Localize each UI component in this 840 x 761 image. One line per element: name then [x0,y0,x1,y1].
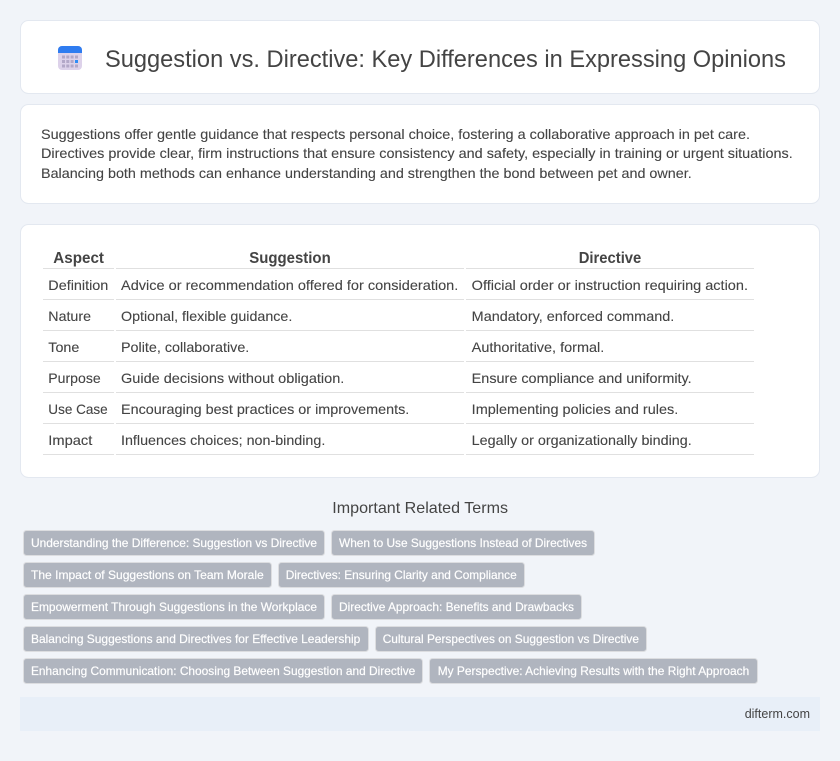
panel: related term tags [24,530,758,684]
table row: Use Case [43,401,754,424]
tag [376,626,646,652]
table row: Use Case: Implementing policies and rules. [472,401,678,417]
table row: Nature: Mandatory, enforced command. [472,308,674,324]
table row: Definition: Official order or instruction requiring action. [472,277,748,293]
panel: comparison table [20,224,820,478]
tag [332,530,594,556]
table row: Nature: Optional, flexible guidance. [121,308,292,324]
tag [430,658,758,684]
table row: Nature: Nature [48,308,91,324]
footer source text: difterm.com [745,706,810,721]
table row: Tone: Authoritative, formal. [472,339,604,355]
table row: Tone [43,339,754,362]
tag [24,562,272,588]
table row: Purpose: Ensure compliance and uniformity. [472,370,692,386]
table row: Impact: Impact [48,432,92,448]
tag: Directives: Ensuring Clarity and Compliance [286,568,517,582]
panel: header [20,20,820,94]
tag: Balancing Suggestions and Directives for Effective Leadership [31,632,361,646]
tag: My Perspective: Achieving Results with the Right Approach [438,664,749,678]
table row: Use Case: Encouraging best practices or improvements. [121,401,409,417]
tag [24,658,422,684]
table row: Use Case: Use Case [48,401,108,417]
table header: Directive [579,250,641,267]
tag [24,626,368,652]
tag [332,594,582,620]
tag [24,594,324,620]
tag: Understanding the Difference: Suggestion vs Directive [31,536,317,550]
tag: Enhancing Communication: Choosing Between Suggestion and Directive [31,664,416,678]
icon: calendar [58,46,82,70]
table row: Definition: Advice or recommendation offered for consideration. [121,277,458,293]
table row: Nature [43,308,754,331]
text block: introduction: Balancing both methods can enhance understanding and strengthen the bond between pet and owner. [41,165,692,181]
tag: When to Use Suggestions Instead of Directives [339,536,587,550]
table row: Impact: Influences choices; non-binding. [121,432,325,448]
tag [24,530,324,556]
footer [20,697,820,731]
table header: Aspect [53,250,105,267]
text block: introduction [41,126,793,181]
text block: introduction: Suggestions offer gentle guidance that respects personal choice, fostering a collaborative approach in pet care. [41,126,750,142]
tag: The Impact of Suggestions on Team Morale [31,568,264,582]
table row: Tone: Tone [48,339,80,355]
panel: introduction [20,104,820,204]
table header: Suggestion [249,250,331,267]
tag [278,562,524,588]
table row: Definition: Definition [48,277,108,293]
text block: introduction: Directives provide clear, firm instructions that ensure consistency and safety, especially in training or urgent situations. [41,145,793,161]
table header [43,250,754,269]
table row: Purpose [43,370,754,393]
table row: Impact: Legally or organizationally binding. [472,432,692,448]
table row: Definition [43,277,754,300]
title: Suggestion vs. Directive: Key Differences in Expressing Opinions [105,46,786,73]
tag: Directive Approach: Benefits and Drawbacks [339,600,574,614]
tag: Cultural Perspectives on Suggestion vs Directive [383,632,639,646]
tag: Empowerment Through Suggestions in the Workplace [31,600,317,614]
table row: Tone: Polite, collaborative. [121,339,249,355]
heading: important related terms: Important Related Terms [332,500,508,517]
table row: Impact [43,432,754,455]
table row: Purpose: Guide decisions without obligation. [121,370,344,386]
table row: Purpose: Purpose [48,370,101,386]
